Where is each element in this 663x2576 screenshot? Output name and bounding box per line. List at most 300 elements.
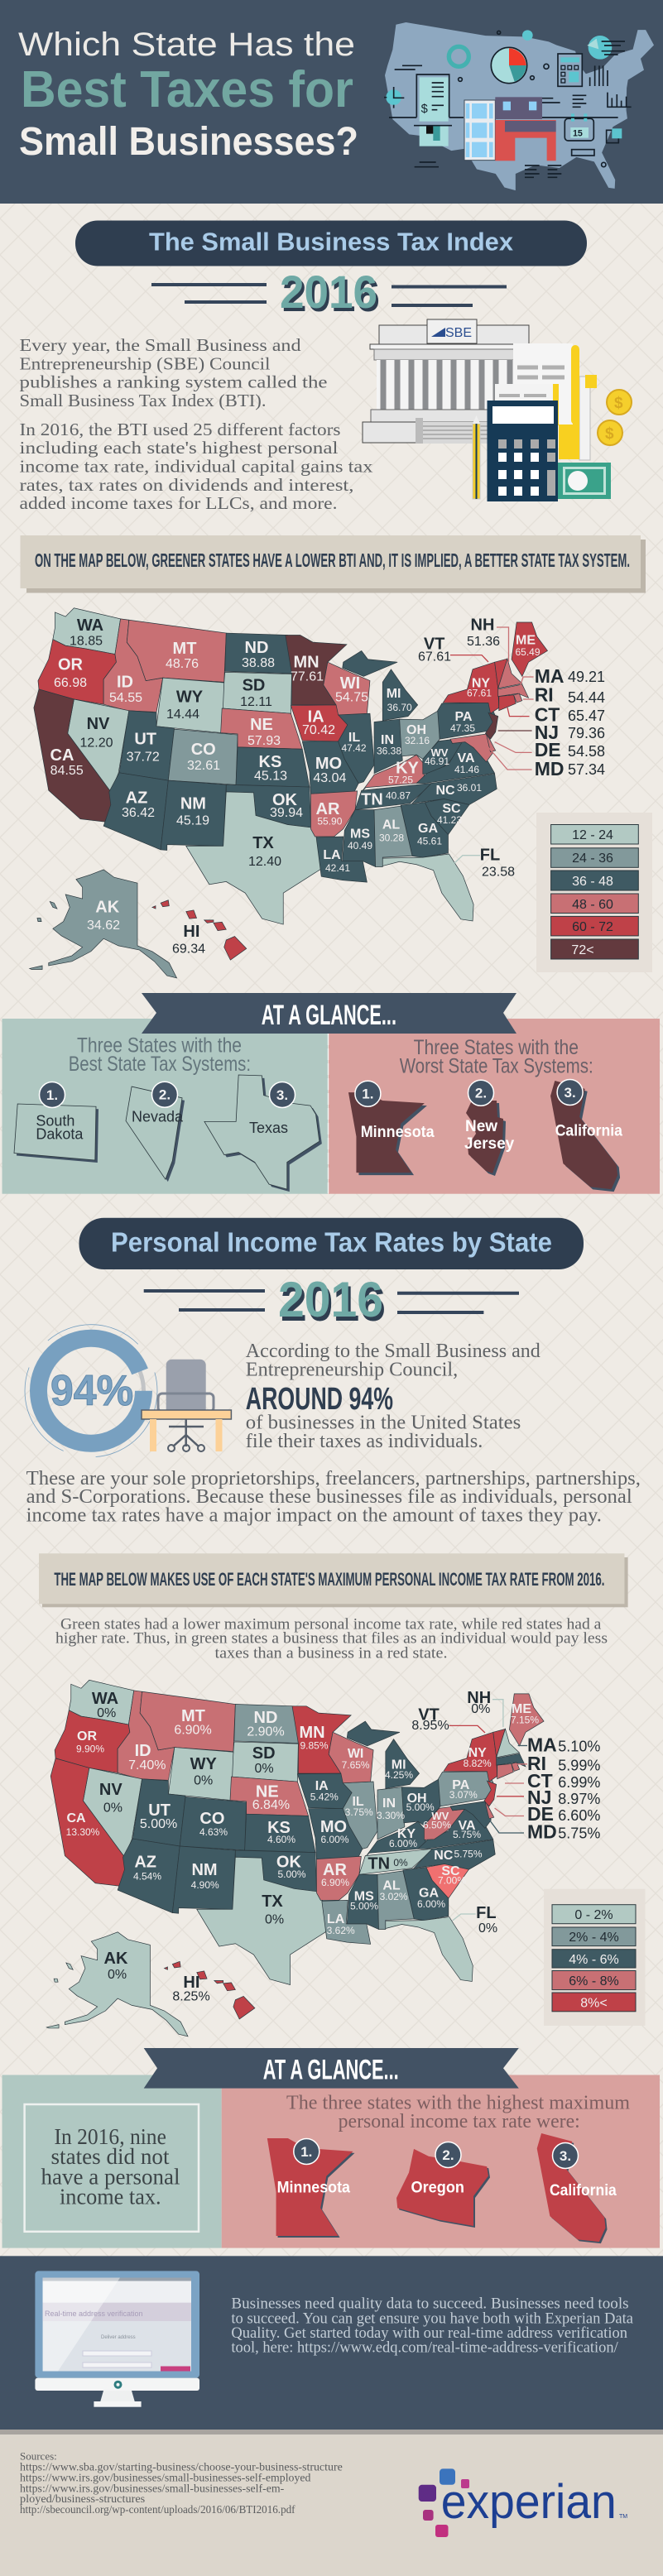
state labels and values: 6.99%	[558, 1774, 600, 1791]
panel: call to action	[0, 2256, 663, 2430]
state labels and values: MT	[173, 640, 196, 658]
state labels and values: MO	[315, 755, 342, 773]
state labels and values: 7.00%	[438, 1875, 466, 1887]
legend: tax rate ranges: 6% - 8%	[569, 1974, 619, 1988]
state labels and values: 41.23	[437, 814, 462, 826]
legend: BTI ranges: 12 - 24	[572, 828, 613, 842]
state labels and values: 67.61	[467, 687, 492, 698]
state: Minnesota	[348, 1081, 435, 1175]
state labels and values: 69.34	[172, 942, 205, 957]
state labels and values: 6.00%	[320, 1834, 349, 1845]
heading: worst systems	[400, 1036, 593, 1078]
choropleth map: Small Business Tax Index by state	[30, 608, 605, 978]
legend: tax rate ranges: 0 - 2%	[574, 1908, 613, 1922]
text block: call to action: to succeed. You can get ensure you have both with Experian Data	[231, 2310, 634, 2327]
state labels and values: MD	[535, 758, 564, 780]
logo: Experian: experian	[441, 2475, 617, 2529]
state: Nevada	[126, 1082, 185, 1182]
state labels and values: 0%	[471, 1702, 490, 1716]
legend: BTI ranges: 36 - 48	[572, 875, 613, 889]
heading: highest rates	[286, 2093, 630, 2132]
state labels and values: MN	[293, 653, 319, 671]
icon: receipt: $	[421, 103, 428, 116]
state labels and values: 32.61	[187, 759, 220, 773]
at a glance panels: best and worst states	[2, 993, 660, 1194]
state labels and values: MT	[181, 1707, 205, 1725]
heading: highest rates: personal income tax rate were:	[339, 2111, 580, 2132]
state labels and values: LA	[327, 1912, 345, 1926]
text block: call to action: Businesses need quality data to succeed. Businesses need tools	[231, 2295, 629, 2313]
state labels and values: GA	[419, 1887, 439, 1901]
state labels and values: 6.50%	[423, 1819, 451, 1830]
state labels and values: 39.94	[270, 806, 303, 820]
icon: donut chart	[449, 46, 468, 66]
state labels and values: 37.72	[127, 751, 160, 765]
icon: calculator	[487, 401, 558, 501]
callout: nine states: states did not	[51, 2144, 170, 2169]
state labels and values: 5.00%	[140, 1817, 177, 1831]
state labels and values: 0%	[108, 1968, 127, 1982]
state labels and values: OH	[406, 723, 426, 737]
state labels and values: 65.47	[568, 708, 605, 724]
state: California: California	[550, 2182, 617, 2199]
state labels and values: 5.00%	[277, 1868, 306, 1880]
icon: coins	[598, 390, 632, 445]
state labels and values: FL	[476, 1904, 497, 1922]
state labels and values: 54.44	[568, 689, 605, 706]
state labels and values	[66, 1689, 600, 2004]
state labels and values: OK	[272, 791, 298, 809]
state labels and values: 3.62%	[327, 1925, 355, 1936]
at a glance panels: no income tax and highest rates	[2, 2048, 660, 2248]
icon: 94% donut	[25, 1325, 157, 1457]
state labels and values: 8.97%	[558, 1791, 600, 1807]
legend: BTI ranges: 72<	[571, 943, 594, 957]
icon: storefront	[495, 97, 556, 161]
state labels and values: NV	[87, 715, 110, 733]
state labels and values: RI	[535, 684, 554, 706]
state labels and values: 40.49	[348, 840, 372, 851]
text block: map description: Green states had a lower maximum personal income tax rate, while red states had a	[60, 1615, 602, 1633]
state labels and values: VA	[458, 1819, 476, 1833]
text block: map description	[55, 1615, 608, 1662]
state: South Dakota: 1.	[46, 1087, 58, 1103]
state labels and values: 43.04	[313, 771, 347, 785]
icon: calculator	[558, 54, 582, 86]
state labels and values: GA	[418, 822, 438, 836]
state labels and values: VA	[457, 751, 475, 765]
state labels and values: TX	[252, 834, 274, 852]
state labels and values: MS	[350, 827, 370, 842]
state labels and values: 5.75%	[454, 1849, 483, 1860]
state: California	[537, 2133, 617, 2243]
state labels and values: RI	[527, 1753, 546, 1774]
state labels and values: AL	[382, 1878, 401, 1892]
text block: 94 percent statistic: file their taxes as individuals.	[246, 1431, 483, 1452]
state labels and values: ME	[516, 634, 536, 647]
logo: Experian: TM	[619, 2514, 627, 2520]
state labels and values: 57.34	[568, 761, 605, 778]
text block: sources: Sources:	[20, 2449, 57, 2463]
year heading 2016: 2016	[280, 266, 377, 318]
state labels and values: 65.49	[515, 646, 540, 658]
state labels and values: DE	[535, 739, 561, 760]
state labels and values: FL	[480, 847, 500, 865]
state labels and values: NH	[467, 1689, 491, 1707]
state labels and values: NE	[256, 1782, 279, 1801]
state labels and values: SC	[441, 1864, 460, 1878]
state labels and values: 5.75%	[453, 1829, 481, 1840]
state labels and values: 12.20	[79, 736, 113, 750]
state: California: 3.	[560, 2148, 571, 2164]
state labels and values: MD	[527, 1820, 557, 1842]
text block: business types: income tax rates have a major impact on the amount of taxes they pay.	[26, 1504, 602, 1526]
state labels and values: IN	[382, 1796, 396, 1811]
icon: cash	[556, 463, 611, 499]
state: California	[550, 1079, 622, 1192]
state labels and values: CA	[50, 746, 74, 765]
callout strip: map explanation	[39, 1553, 628, 1607]
state labels and values: HI	[183, 923, 199, 941]
state labels and values: 4.54%	[133, 1870, 161, 1882]
state labels and values: 4.63%	[199, 1826, 228, 1838]
state labels and values: OK	[276, 1854, 301, 1872]
text block: 94 percent statistic: AROUND 94%	[246, 1382, 393, 1417]
state: Minnesota: 1.	[300, 2144, 312, 2160]
icon: desktop monitor showing address verification page: Real-time address verification	[45, 2310, 143, 2318]
state: New Jersey: New	[465, 1118, 497, 1135]
state labels and values: LA	[323, 848, 341, 862]
state labels and values: 3.75%	[345, 1806, 373, 1818]
state labels and values: IA	[315, 1779, 329, 1793]
state labels and values: ND	[254, 1709, 277, 1727]
state labels and values: CA	[66, 1811, 86, 1825]
heading: best systems: Three States with the	[77, 1034, 242, 1058]
state labels and values: 13.30%	[66, 1826, 100, 1838]
state labels and values: MO	[320, 1818, 347, 1836]
state labels and values: 18.85	[70, 634, 103, 649]
section heading pill: Small Business Tax Index	[75, 220, 587, 266]
state: South Dakota	[14, 1082, 98, 1163]
legend: BTI ranges: 48 - 60	[572, 898, 613, 912]
section heading pill: Small Business Tax Index: The Small Business Tax Index	[149, 227, 514, 257]
callout: nine states: In 2016, nine	[55, 2124, 166, 2149]
text block: 94 percent statistic: According to the Small Business and	[246, 1341, 540, 1362]
state: Minnesota: Minnesota	[361, 1124, 435, 1141]
state labels and values: 7.65%	[342, 1759, 370, 1771]
state labels and values: 5.42%	[310, 1792, 339, 1803]
state labels and values: 45.61	[417, 836, 442, 847]
state labels and values: 6.60%	[558, 1807, 600, 1824]
state labels and values: VT	[418, 1706, 440, 1725]
state: Texas: Texas	[249, 1120, 288, 1136]
header panel	[0, 0, 663, 204]
icon: pie chart	[491, 47, 527, 84]
state labels and values: TX	[262, 1892, 283, 1911]
state labels and values: KS	[259, 753, 281, 771]
state: Minnesota: Minnesota	[277, 2180, 350, 2197]
state labels and values: 6.00%	[389, 1838, 417, 1849]
heading: best systems: Best State Tax Systems:	[69, 1053, 251, 1076]
state labels and values: 54.58	[568, 743, 605, 760]
section heading pill: Personal Income Tax Rates: Personal Income Tax Rates by State	[111, 1227, 552, 1258]
state labels and values: 5.10%	[558, 1738, 600, 1754]
state labels and values: 4.25%	[385, 1769, 413, 1781]
state labels and values: 77.61	[291, 670, 324, 684]
heading: highest rates: The three states with the highest maximum	[286, 2093, 630, 2114]
intro text block: income tax rate, individual capital gains tax	[20, 457, 373, 477]
state: Texas	[204, 1075, 322, 1192]
state labels and values: 9.90%	[76, 1743, 104, 1754]
year heading 2016: 2016	[281, 1276, 386, 1331]
state: Minnesota	[267, 2138, 354, 2238]
icon: receipt	[389, 74, 464, 146]
state labels and values: PA	[454, 710, 473, 724]
state labels and values: MA	[535, 665, 564, 687]
state labels and values: NE	[250, 716, 273, 734]
intro text block: Every year, the Small Business and	[20, 335, 301, 355]
banner: at a glance	[144, 2048, 519, 2089]
state labels and values: ID	[117, 674, 133, 692]
state labels and values: 36.42	[122, 806, 155, 820]
state labels and values: 0%	[103, 1801, 123, 1816]
text block: sources: ployed/business-structures	[20, 2493, 145, 2506]
intro text block: In 2016, the BTI used 25 different factors	[20, 420, 341, 439]
text block: map description: higher rate. Thus, in green states a business that files as an individual would pay less	[55, 1630, 608, 1647]
state labels and values: NJ	[527, 1787, 551, 1808]
state labels and values: TN	[368, 1855, 390, 1873]
state labels and values: 54.55	[109, 691, 142, 705]
state labels and values: ID	[135, 1742, 151, 1760]
title: Best Taxes for	[21, 61, 353, 118]
state labels and values: 3.30%	[377, 1810, 405, 1821]
state labels and values: WI	[348, 1747, 363, 1761]
icon: desktop monitor showing address verification page: Deliver address	[101, 2335, 136, 2340]
state labels and values: WV	[431, 746, 449, 759]
banner: at a glance: AT A GLANCE...	[262, 1000, 396, 1031]
state labels and values: 48.76	[166, 657, 199, 671]
callout: nine states: have a personal	[41, 2165, 180, 2190]
leader lines	[449, 1700, 527, 1921]
panel: worst states	[329, 1019, 660, 1194]
state labels and values: AZ	[134, 1854, 156, 1872]
panel: footer	[0, 2430, 663, 2576]
legend: tax rate ranges: 8%<	[580, 1996, 608, 2011]
state labels and values: 8.25%	[172, 1990, 210, 2004]
state labels and values: KY	[397, 1827, 416, 1841]
state: California: California	[555, 1123, 622, 1140]
state labels and values: 6.84%	[252, 1798, 290, 1812]
state labels and values: 4.60%	[267, 1834, 295, 1845]
section heading pill: Personal Income Tax Rates	[79, 1218, 584, 1269]
state labels and values: 84.55	[50, 764, 84, 778]
state labels and values: SD	[243, 677, 265, 695]
state labels and values: 14.44	[166, 708, 199, 722]
state labels and values: CT	[527, 1770, 553, 1792]
intro text block: publishes a ranking system called the	[20, 372, 327, 392]
year heading 2016	[151, 266, 507, 321]
state labels and values: NY	[468, 1746, 487, 1760]
state labels and values: VT	[424, 636, 444, 654]
map shapes	[46, 1680, 544, 2036]
callout strip: map explanation	[20, 535, 646, 592]
banner: at a glance: AT A GLANCE...	[263, 2054, 399, 2085]
state labels and values: 12.11	[240, 695, 272, 709]
icon: calendar: 15	[573, 129, 583, 139]
state labels and values: SD	[252, 1744, 276, 1763]
state labels and values: MA	[527, 1734, 557, 1755]
state labels and values: 3.07%	[449, 1789, 478, 1801]
text block: 94 percent statistic: of businesses in the United States	[246, 1413, 521, 1434]
state labels and values: WA	[77, 616, 103, 635]
state labels and values: NJ	[535, 722, 559, 743]
state labels and values: AR	[323, 1861, 347, 1879]
state: Texas: 3.	[276, 1087, 288, 1103]
state labels and values: OR	[58, 655, 84, 674]
state labels and values: NY	[472, 677, 490, 690]
state labels and values: 5.99%	[558, 1758, 600, 1774]
state labels and values: MI	[387, 687, 401, 701]
state labels and values: 36.38	[377, 745, 401, 756]
state labels and values: MI	[392, 1758, 406, 1772]
icon: coins: $	[614, 395, 623, 412]
state: New Jersey	[464, 1080, 515, 1176]
intro text block: Small Business Tax Index (BTI).	[20, 391, 267, 410]
legend: tax rate ranges: 2% - 4%	[569, 1931, 619, 1945]
state labels and values: 51.36	[467, 635, 500, 649]
legend: BTI ranges: 60 - 72	[572, 920, 613, 934]
state labels and values: CT	[535, 703, 560, 725]
legend: BTI ranges: 24 - 36	[572, 851, 613, 866]
icon: checklist pie	[587, 36, 625, 60]
state labels and values: 0%	[478, 1921, 497, 1936]
icon: coins: $	[605, 425, 614, 443]
banner: at a glance	[142, 993, 516, 1034]
state labels and values: 38.88	[242, 656, 275, 670]
state labels and values: WA	[92, 1690, 118, 1708]
state labels and values: ME	[512, 1702, 531, 1716]
state labels and values: 0%	[97, 1706, 116, 1720]
text block: sources	[20, 2449, 343, 2516]
state labels and values: 7.15%	[511, 1715, 539, 1726]
state labels and values: WV	[431, 1810, 449, 1822]
state labels and values: 46.91	[425, 756, 449, 767]
callout: nine states	[25, 2104, 199, 2232]
state labels and values: 67.61	[418, 650, 451, 664]
choropleth map: maximum personal income tax rate by state	[46, 1680, 600, 2036]
callout: nine states: income tax.	[60, 2185, 161, 2209]
state labels and values: IL	[348, 731, 360, 745]
state: Oregon: 2.	[442, 2147, 454, 2163]
state: New Jersey: 2.	[475, 1086, 487, 1101]
state labels and values: NC	[434, 1849, 454, 1863]
title: Small Businesses?	[19, 120, 358, 164]
title: Which State Has the	[18, 26, 355, 63]
state labels and values: OH	[407, 1792, 427, 1806]
heading: worst systems: Worst State Tax Systems:	[400, 1055, 593, 1078]
state labels and values: AK	[104, 1950, 128, 1968]
state labels and values: 5.00%	[350, 1900, 378, 1912]
state labels and values: 9.85%	[300, 1740, 329, 1752]
state labels and values: 49.21	[568, 669, 605, 685]
state labels and values: IA	[308, 708, 324, 727]
state labels and values: NM	[191, 1861, 218, 1879]
state labels and values: CO	[191, 741, 216, 759]
state labels and values: AZ	[126, 789, 147, 808]
state labels and values: 30.28	[379, 832, 404, 844]
state labels and values: 5.00%	[406, 1801, 435, 1813]
icon: SBE Council building	[363, 319, 529, 444]
year heading 2016: 2016	[282, 269, 380, 321]
panel: best states	[2, 1019, 328, 1194]
state labels and values: 57.93	[247, 734, 281, 748]
text block: 94 percent statistic	[246, 1341, 540, 1452]
state labels and values: 3.02%	[380, 1891, 408, 1902]
state labels and values: 0%	[393, 1857, 408, 1868]
icon: SBE Council building: SBE	[445, 326, 472, 340]
legend: BTI ranges	[536, 813, 652, 972]
state labels and values: 36.01	[457, 782, 482, 794]
state labels and values: 8.82%	[464, 1758, 492, 1769]
state: Oregon	[396, 2142, 490, 2228]
state labels and values: NC	[435, 784, 455, 798]
icon: desk and chair	[142, 1360, 231, 1451]
intro text block	[20, 335, 373, 513]
icon: calendar	[565, 113, 593, 141]
text block: sources: http://sbecouncil.org/wp-content/uploads/2016/06/BTI2016.pdf	[20, 2504, 295, 2516]
leader lines	[450, 627, 534, 863]
state labels and values: SC	[442, 802, 461, 816]
icon: bar charts and misc marks	[395, 31, 632, 177]
state labels and values: 6.00%	[417, 1898, 445, 1910]
state labels and values: 79.36	[568, 725, 605, 741]
state labels and values: KY	[396, 760, 420, 778]
state labels and values: 6.90%	[321, 1877, 349, 1888]
state: South Dakota: Dakota	[36, 1126, 84, 1143]
state labels and values: HI	[183, 1974, 199, 1992]
year heading 2016: 2016	[278, 1272, 383, 1327]
state labels and values: 47.42	[341, 742, 367, 754]
state labels and values: NM	[180, 795, 206, 813]
text block: 94 percent statistic: Entrepreneurship Council,	[246, 1359, 458, 1380]
state labels and values: 70.42	[302, 723, 335, 737]
state labels and values: UT	[148, 1801, 171, 1820]
state labels and values: 6.90%	[174, 1724, 212, 1738]
state labels and values: 12.40	[248, 855, 281, 869]
text block: call to action: Quality. Get started today with our real-time address verification	[231, 2324, 627, 2342]
state labels and values: 41.46	[454, 764, 479, 775]
state labels and values: 4.90%	[191, 1879, 219, 1891]
icon: 94% donut: 94%	[50, 1367, 133, 1415]
state labels and values: 36.70	[387, 702, 412, 713]
icon: clock	[384, 87, 404, 108]
heading: worst systems: Three States with the	[414, 1036, 579, 1059]
title	[18, 26, 358, 164]
state labels and values: 2.90%	[247, 1725, 285, 1739]
state: Oregon: Oregon	[411, 2180, 464, 2197]
text block: business types: and S-Corporations. Because these businesses file as individuals, personal	[26, 1486, 632, 1508]
state: Nevada: 2.	[159, 1087, 171, 1103]
state labels and values: AL	[382, 818, 400, 832]
state labels and values: MN	[299, 1724, 325, 1742]
state labels and values: 54.75	[335, 690, 368, 704]
state labels and values: 34.62	[87, 919, 120, 933]
state labels and values: KS	[267, 1819, 291, 1837]
state labels and values: MS	[354, 1890, 374, 1903]
text block: sources: https://www.sba.gov/starting-business/choose-your-business-structure	[20, 2461, 343, 2473]
state labels and values: AK	[95, 899, 120, 917]
state labels and values: 45.19	[176, 814, 209, 827]
